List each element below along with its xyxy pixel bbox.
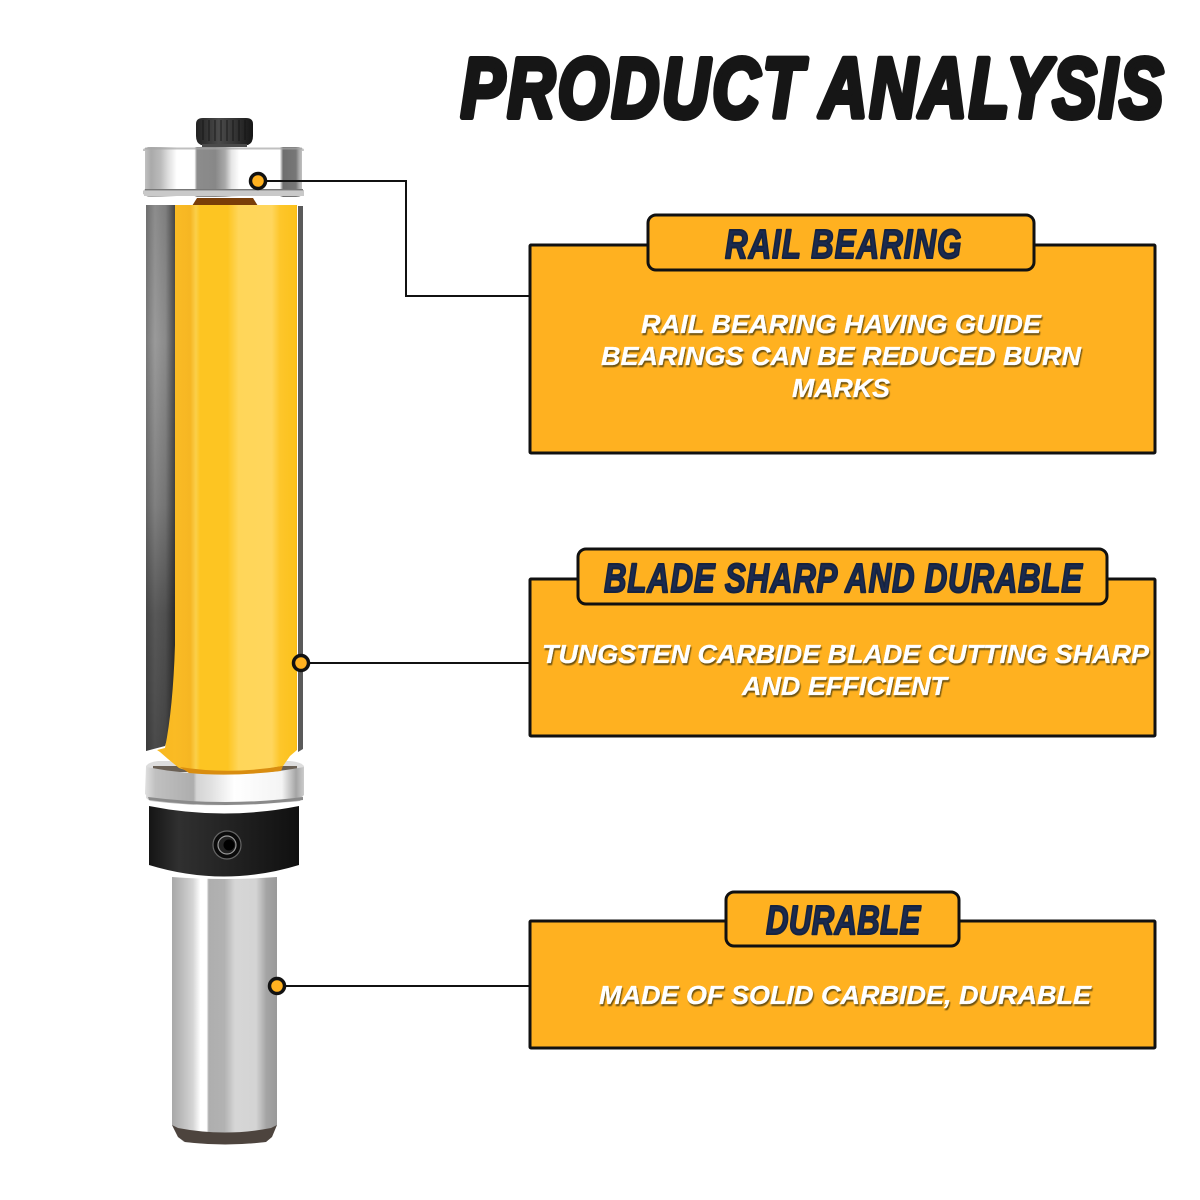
text block: blade: [542, 639, 1150, 701]
text block: blade: TUNGSTEN CARBIDE BLADE CUTTING SHARP: [542, 639, 1150, 669]
carbide blade: [146, 205, 176, 751]
text block: rail bearing: [601, 309, 1082, 403]
bearing neck: [192, 198, 258, 206]
top guide bearing: [143, 147, 304, 197]
text block: rail bearing: BEARINGS CAN BE REDUCED BURN: [601, 341, 1082, 371]
heading tab: rail bearing: [648, 215, 1034, 270]
text block: blade: AND EFFICIENT: [741, 671, 949, 701]
panel: blade sharp and durable: [530, 549, 1155, 736]
connector: durable: [270, 978, 529, 994]
connector: rail bearing: [250, 174, 529, 296]
panel: durable: [530, 892, 1155, 1048]
lower bearing: [145, 761, 304, 806]
text block: rail bearing: MARKS: [792, 373, 891, 403]
heading tab: rail bearing: RAIL BEARING: [725, 221, 961, 267]
connector: blade: [294, 656, 529, 670]
title: [461, 41, 1163, 135]
yellow cutter body: [157, 205, 297, 774]
router bit illustration: [143, 118, 304, 1144]
title: PRODUCT: [461, 41, 808, 135]
shank: [172, 877, 277, 1144]
icon: set screw: [213, 831, 241, 859]
icon: bearing screw: [196, 118, 253, 148]
black collar: [149, 806, 299, 876]
right blade edge: [298, 206, 303, 752]
title: ANALYSIS: [818, 41, 1163, 135]
text block: rail bearing: RAIL BEARING HAVING GUIDE: [641, 309, 1042, 339]
cutter underside: [180, 766, 283, 775]
heading tab: blade: BLADE SHARP AND DURABLE: [604, 555, 1083, 601]
heading tab: durable: DURABLE: [766, 897, 922, 943]
text block: durable: MADE OF SOLID CARBIDE, DURABLE: [599, 980, 1092, 1010]
heading tab: durable: [726, 892, 959, 946]
panel: rail bearing: [530, 215, 1155, 453]
